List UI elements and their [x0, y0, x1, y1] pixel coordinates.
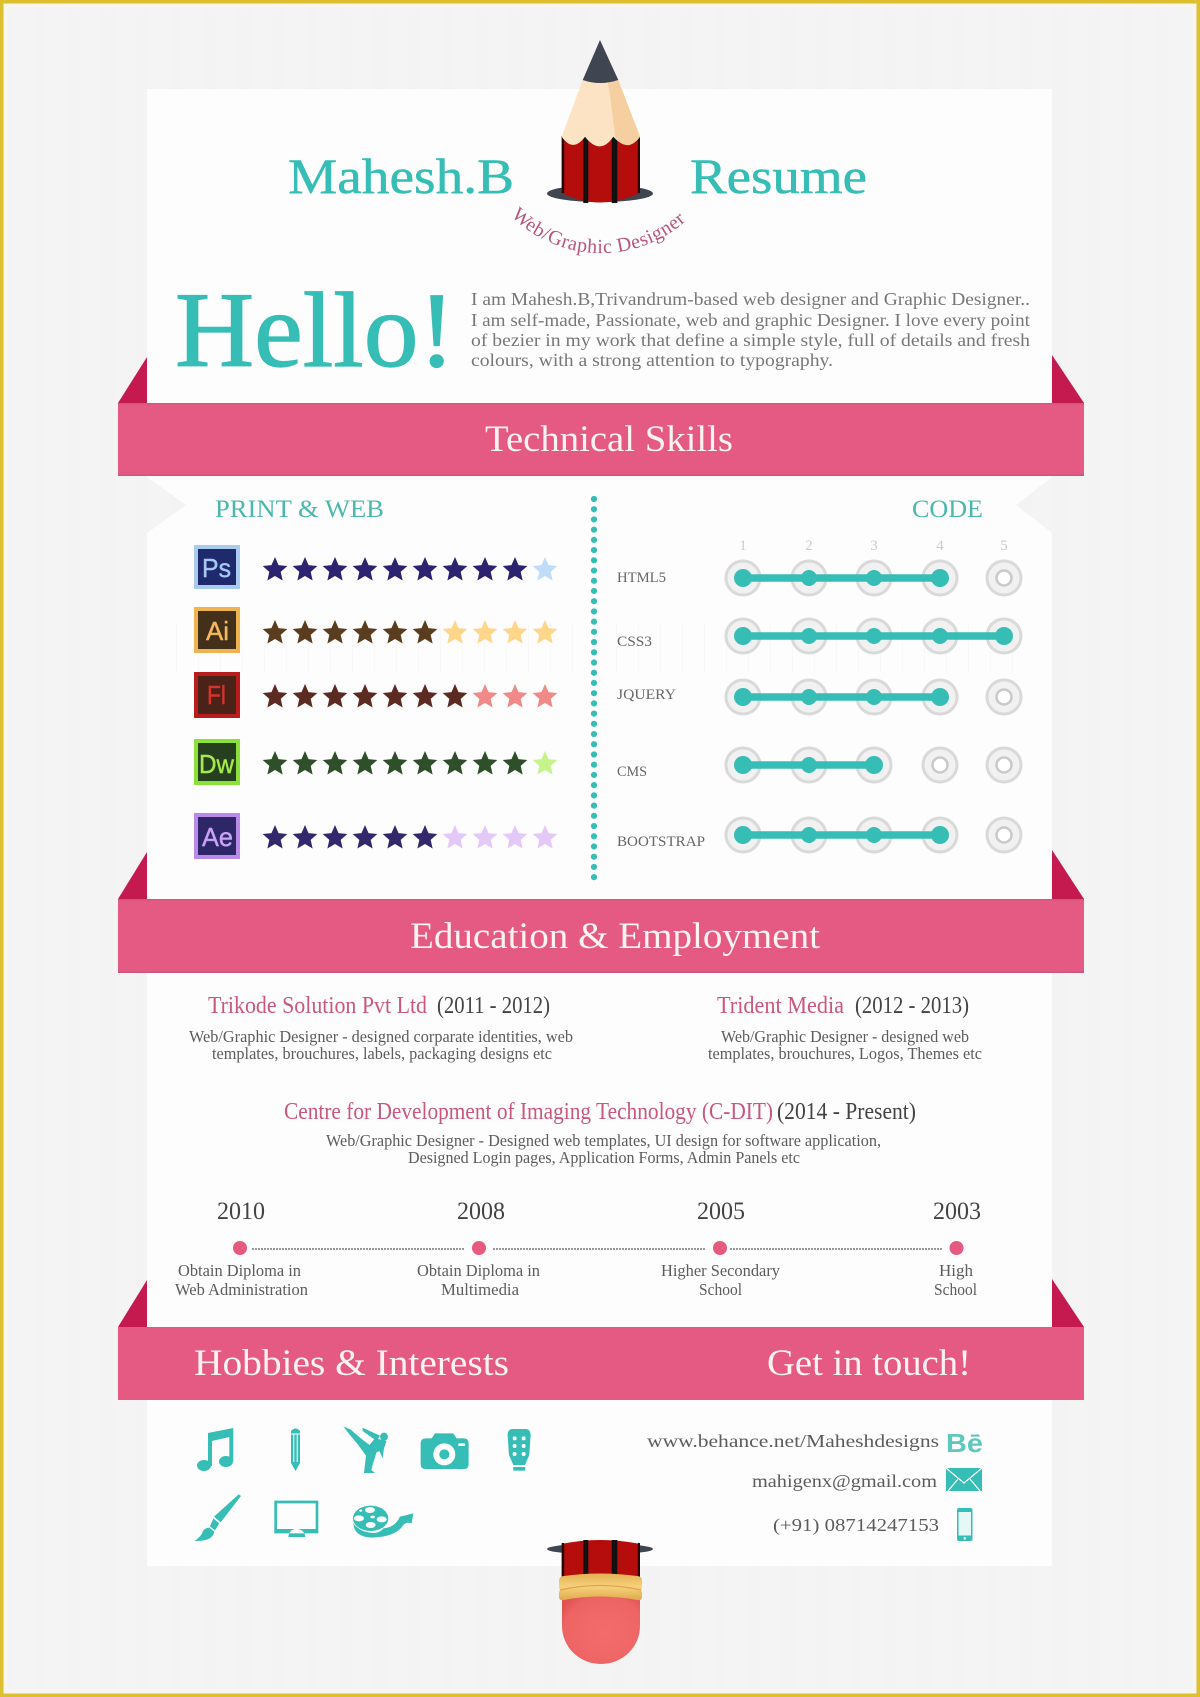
timeline: Web Administration: [175, 1280, 308, 1299]
icon: pencil eraser end: [547, 1540, 653, 1664]
icon: music notes: [197, 1428, 233, 1471]
timeline: Obtain Diploma in: [417, 1261, 540, 1280]
rating: Illustrator stars: [263, 620, 557, 644]
title: resume: Resume: [690, 148, 867, 204]
icon: Dreamweaver: [194, 739, 240, 785]
icon: film reel: [353, 1506, 413, 1538]
job: Trikode Solution: [189, 993, 573, 1063]
icon: Photoshop: [194, 545, 240, 589]
icon: Illustrator: [194, 607, 240, 653]
text block: introduction: I am self-made, Passionate, web and graphic Designer. I love every point: [471, 310, 1030, 330]
job: Trident Media: templates, brouchures, Logos, Themes etc: [708, 1044, 982, 1063]
job: C-DIT: (2014 - Present): [777, 1099, 916, 1125]
job: Trident Media: Web/Graphic Designer - designed web: [721, 1027, 969, 1046]
contact: behance: [647, 1428, 983, 1458]
timeline: Higher Secondary: [661, 1261, 780, 1280]
contact: behance: www.behance.net/Maheshdesigns: [647, 1431, 939, 1451]
contact: behance: Bē: [946, 1428, 983, 1458]
timeline: [175, 1198, 981, 1299]
job: Trikode Solution: Trikode Solution Pvt Ltd: [208, 993, 427, 1019]
timeline: Obtain Diploma in: [178, 1261, 301, 1280]
skill: jQuery: JQUERY: [617, 687, 676, 703]
scale numbers 1 to 5: 2: [805, 538, 813, 554]
job: Trikode Solution: templates, brouchures, labels, packaging designs etc: [212, 1044, 552, 1063]
skill: CMS: CMS: [617, 764, 647, 780]
icon: pencil: [291, 1428, 300, 1471]
ribbon: hobbies and contact: Hobbies & Interests: [194, 1343, 509, 1384]
ribbon: technical skills: Technical Skills: [485, 419, 733, 460]
job: C-DIT: [284, 1099, 916, 1167]
text block: introduction: colours, with a strong attention to typography.: [471, 350, 833, 370]
rating: Photoshop stars: [263, 557, 557, 581]
icon: Illustrator: Ai: [206, 616, 229, 646]
timeline: School: [699, 1280, 742, 1299]
scale numbers 1 to 5: 4: [936, 538, 944, 554]
job: C-DIT: Designed Login pages, Application Forms, Admin Panels etc: [408, 1148, 800, 1167]
subtitle: curved job title: Web/Graphic Designer: [514, 206, 685, 256]
ribbon: education and employment: [118, 850, 1084, 973]
icon: After Effects: [194, 813, 240, 859]
skill: Bootstrap: BOOTSTRAP: [617, 834, 705, 850]
scale numbers 1 to 5: [739, 538, 1008, 554]
skill: CMS: [617, 748, 1021, 782]
job: C-DIT: Centre for Development of Imaging Technology (C-DIT): [284, 1099, 773, 1125]
skill: Bootstrap: [617, 818, 1021, 852]
icon: Photoshop: Ps: [202, 553, 231, 583]
job: Trident Media: (2012 - 2013): [855, 993, 969, 1019]
job: Trikode Solution: (2011 - 2012): [437, 993, 550, 1019]
scale numbers 1 to 5: 5: [1000, 538, 1008, 554]
skill: CSS3: CSS3: [617, 634, 652, 650]
icon: monitor: [274, 1501, 318, 1537]
text block: introduction: [471, 289, 1030, 370]
timeline: High: [939, 1261, 974, 1280]
timeline: Multimedia: [441, 1280, 519, 1299]
skill: CSS3: [617, 619, 1021, 653]
job: Trident Media: [708, 993, 982, 1063]
scale numbers 1 to 5: 3: [870, 538, 878, 554]
skill: HTML5: [617, 561, 1021, 595]
job: C-DIT: Web/Graphic Designer - Designed web templates, UI design for software application,: [326, 1131, 881, 1150]
text block: introduction: of bezier in my work that define a simple style, full of details and fresh: [471, 330, 1030, 350]
icon: Dreamweaver: Dw: [199, 749, 234, 779]
icon: pencil tip: [547, 40, 653, 203]
ribbon: technical skills: [118, 355, 1084, 476]
icon: paint brush: [195, 1494, 241, 1541]
timeline: 2003: [933, 1198, 981, 1225]
contact: phone: [773, 1508, 972, 1541]
contact: email: mahigenx@gmail.com: [752, 1471, 937, 1491]
icon: camera: [421, 1433, 469, 1469]
icon: guitar headstock: [508, 1429, 531, 1471]
job: Trident Media: Trident Media: [717, 993, 844, 1019]
icon: martial artist: [343, 1426, 388, 1473]
timeline: 2008: [457, 1198, 505, 1225]
panel: resume sheet: [147, 89, 1052, 1566]
heading: Hello: Hello!: [175, 272, 455, 390]
contact: email: [752, 1468, 982, 1491]
rating: After Effects stars: [263, 825, 557, 849]
ribbon: hobbies and contact: [118, 1279, 1084, 1400]
ribbon: hobbies and contact: Get in touch!: [767, 1343, 971, 1384]
skill: jQuery: [617, 680, 1021, 714]
job: Trikode Solution: Web/Graphic Designer - designed corparate identities, web: [189, 1027, 573, 1046]
heading: code: CODE: [912, 496, 983, 523]
icon: Flash: Fl: [207, 680, 226, 710]
text block: introduction: I am Mahesh.B,Trivandrum-based web designer and Graphic Designer..: [471, 289, 1030, 309]
heading: print and web: PRINT & WEB: [215, 496, 384, 523]
timeline: 2010: [217, 1198, 265, 1225]
timeline: 2005: [697, 1198, 745, 1225]
scale numbers 1 to 5: 1: [739, 538, 747, 554]
icon: After Effects: Ae: [202, 822, 233, 852]
rating: Dreamweaver stars: [263, 751, 557, 775]
icon: Flash: [194, 672, 240, 718]
timeline: School: [934, 1280, 977, 1299]
divider: dotted column line: [591, 499, 597, 878]
skill: HTML5: HTML5: [617, 570, 666, 586]
ribbon: education and employment: Education & Employment: [410, 916, 821, 957]
title: name: Mahesh.B: [288, 148, 514, 204]
rating: Flash stars: [263, 684, 557, 708]
contact: phone: (+91) 08714247153: [773, 1515, 939, 1536]
